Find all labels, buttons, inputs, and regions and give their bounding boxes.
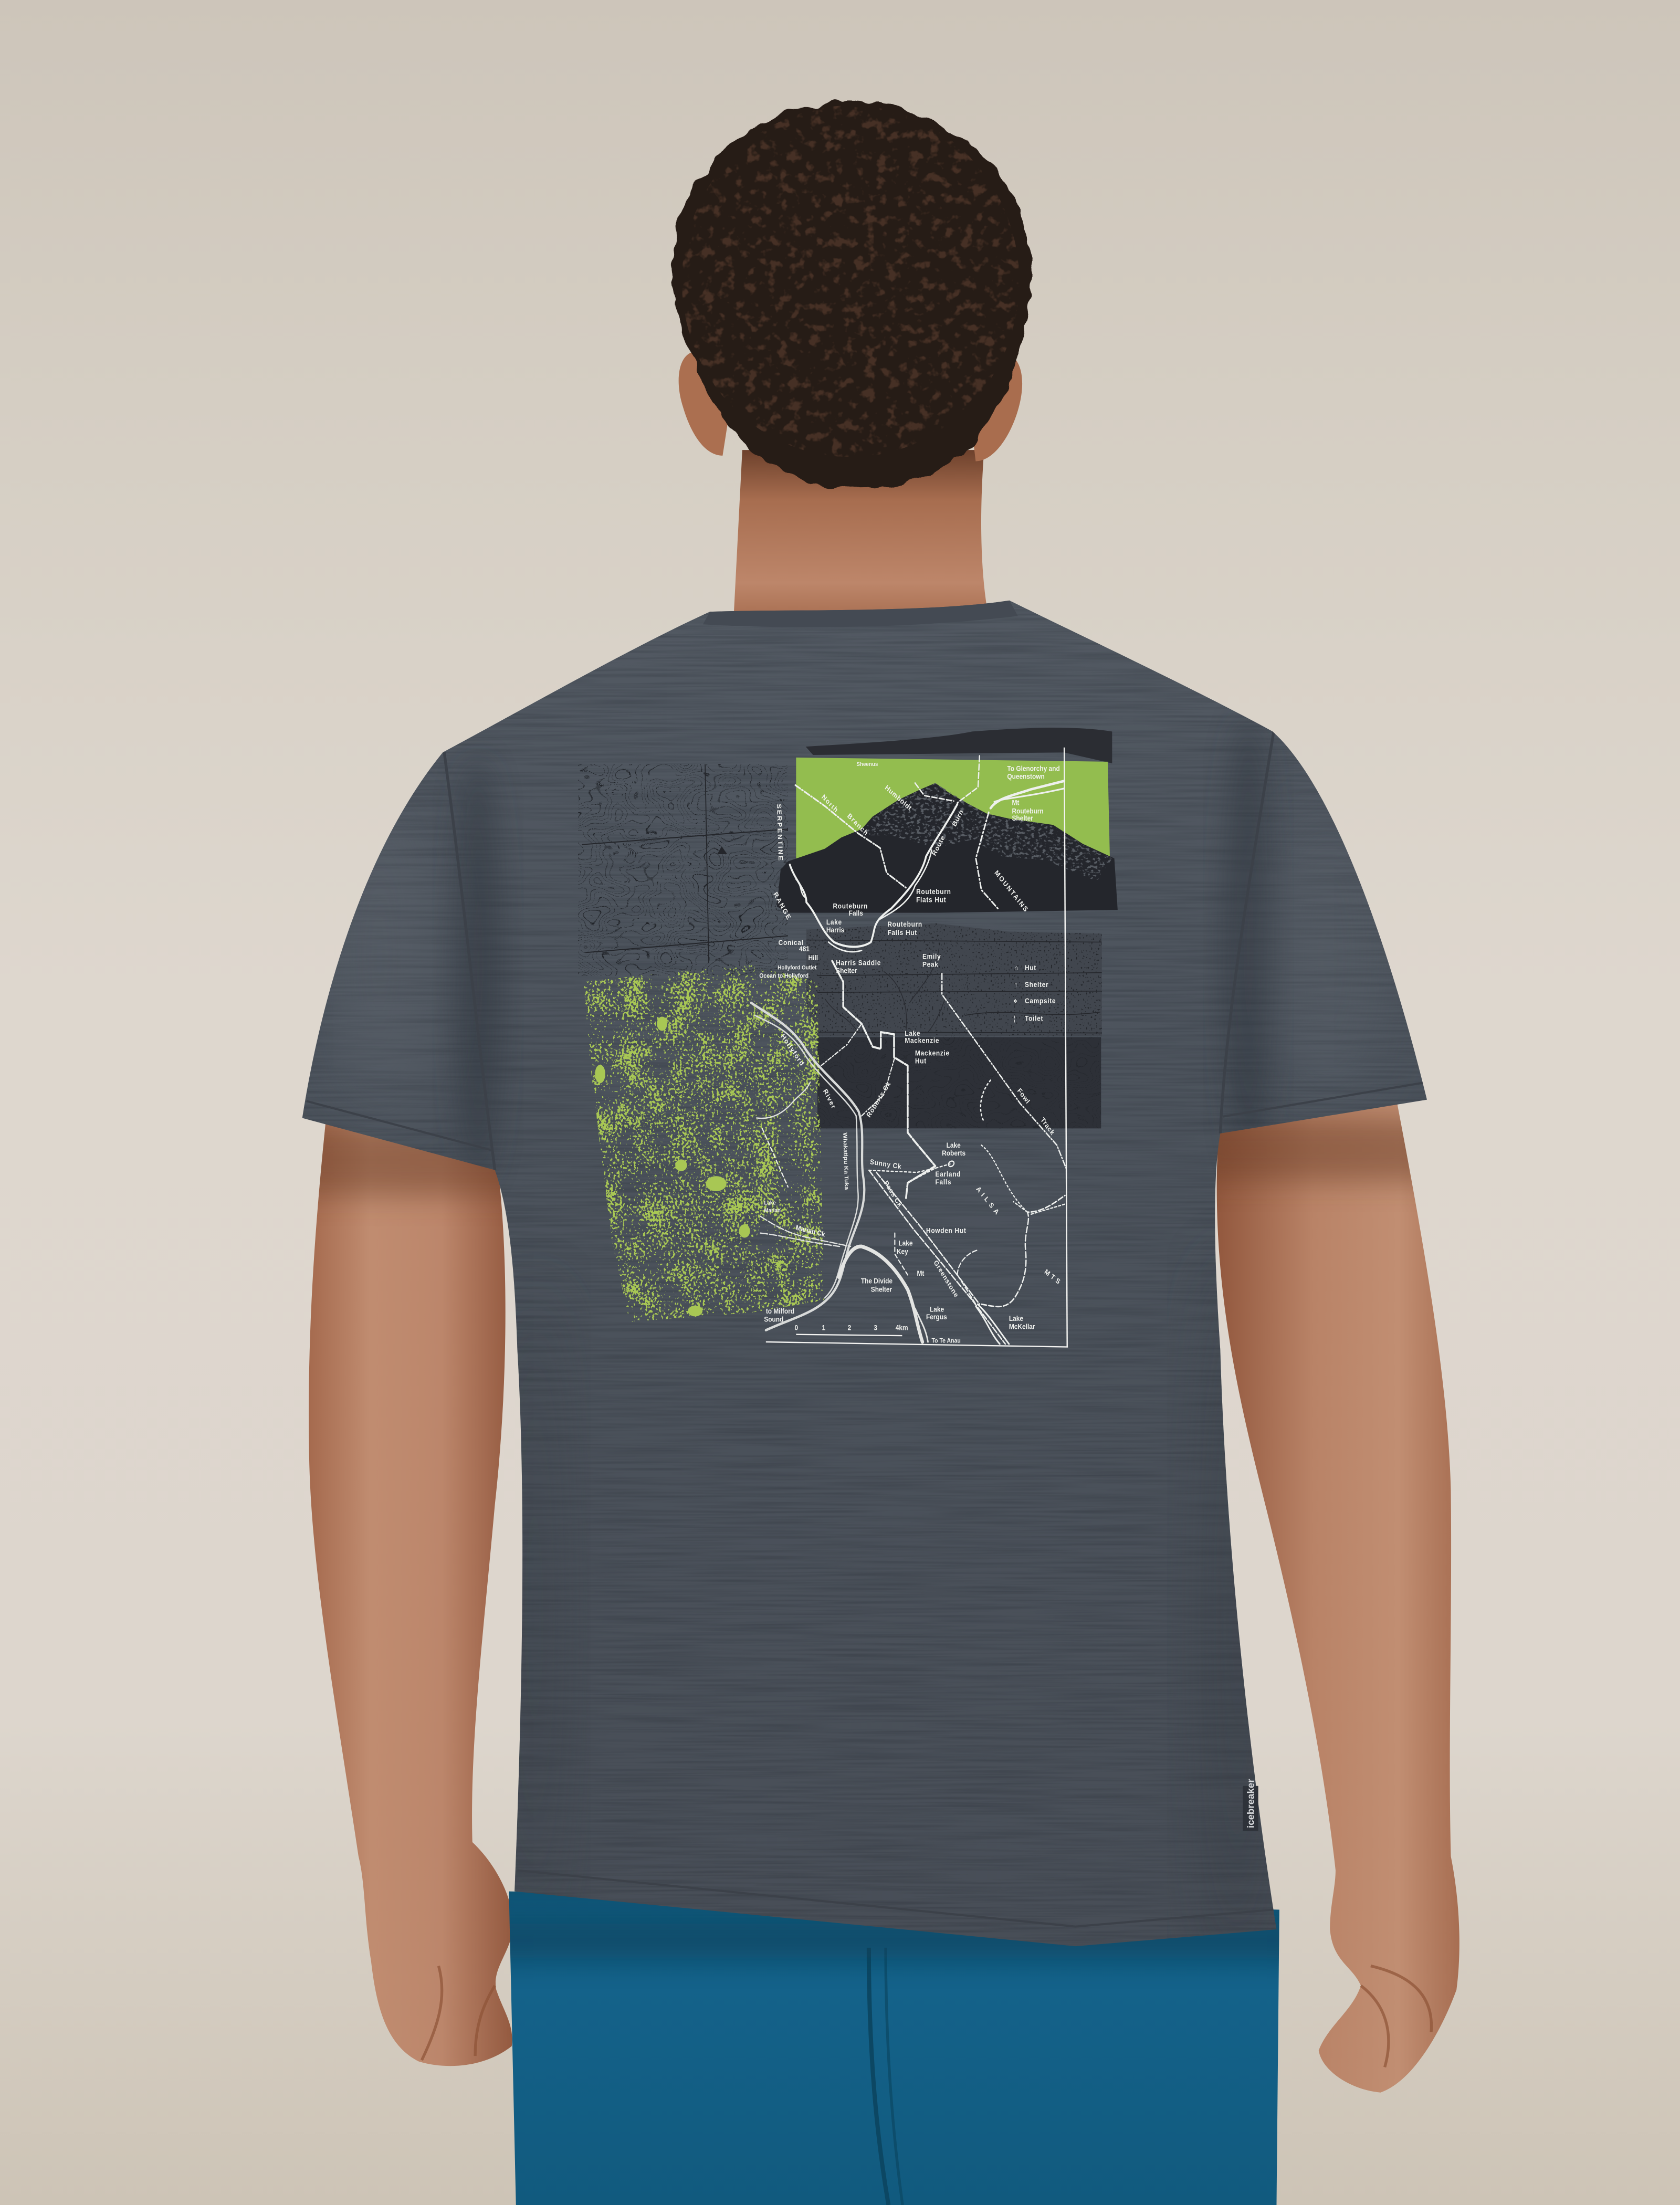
map labels: Mt [917,1269,925,1277]
map labels: Mt [1012,799,1020,807]
topographic contour panel [578,764,788,975]
white map trails and rivers [751,756,1066,1344]
map labels: to Milford [766,1307,794,1315]
map labels: 2 [848,1324,851,1332]
side label [1243,1779,1258,1831]
map labels: Sheenus [856,761,878,768]
green foliage speckle panel [584,965,825,1322]
map labels: Hill [808,953,818,962]
side label: icebreaker [1245,1779,1256,1828]
map labels: Hut [1025,963,1036,972]
map labels: 3 [874,1324,877,1332]
map labels: ⌂ [1014,963,1018,972]
map labels: Roberts [942,1149,965,1157]
map labels: Routeburn [833,902,868,910]
map labels: Peak [922,960,939,969]
map labels: Marian [764,1207,781,1214]
map labels: 1 [822,1324,825,1332]
map labels [759,761,1064,1345]
map labels: North [820,793,840,814]
map labels: SERPENTINE [775,804,784,862]
collar [703,601,1018,627]
map labels: Lake [764,1200,776,1206]
back print: map collage [578,728,1118,1347]
map labels: Fergus [926,1312,947,1321]
shorts [478,1892,1307,2205]
neat border lines and scale bar [766,748,1068,1347]
map labels: Key [897,1247,909,1256]
map labels: Lake [905,1029,920,1037]
t-shirt [302,597,1427,1983]
map labels: Falls Hut [887,928,917,937]
map labels: Track [1039,1116,1056,1137]
map labels: ↑ [1014,980,1017,989]
green sky panel [796,758,1110,860]
map labels: Hollyford [780,1032,806,1068]
map labels: Humboldt [884,783,914,812]
map labels: Queenstown [1007,772,1045,781]
map labels: To Glenorchy and [1007,764,1060,773]
map labels: Routeburn [1012,807,1044,815]
map labels: Pass Ck [883,1179,904,1209]
map labels: Emily [922,952,941,961]
map labels: Harris [826,926,844,934]
map labels: 4km [896,1324,908,1332]
map labels: Routeburn [916,887,951,896]
map labels: Lake [1009,1314,1023,1322]
map labels: Shelter [871,1285,892,1294]
map labels: Shelter [836,967,857,975]
map labels: Greenstone [932,1258,960,1299]
map labels: Burn [950,808,965,828]
map labels: McKellar [1009,1322,1035,1330]
map labels: Whakatipu Ka Tuka [842,1132,849,1190]
map labels: Marian Ck [795,1223,826,1238]
map labels: ¦ [1013,1014,1015,1023]
map labels: Roberts Ck [865,1079,892,1119]
hair [673,101,1031,490]
map labels: Harris Saddle [836,959,881,967]
map labels: Hut [915,1057,927,1065]
map labels: Shelter [1012,814,1033,822]
map labels: The Divide [861,1277,892,1285]
dark mountain [777,783,1118,913]
map labels: Hollyford Outlet [778,964,817,971]
map labels: Campsite [1025,996,1056,1005]
horizontal strata panel with dots [806,923,1102,1036]
map labels: ⋄ [1013,996,1017,1005]
model's right-side arm and hand [1195,1090,1460,2093]
map labels: 481 [799,944,810,953]
map labels: Fowl [1016,1086,1032,1106]
map labels: Earland [936,1170,961,1178]
map labels: MOUNTAINS [993,868,1030,914]
map labels: Routeburn [887,920,922,928]
map labels: Shelter [1025,980,1048,989]
map labels: Ocean to Hollyford [759,973,808,979]
map labels: Branch [846,812,870,837]
map labels: Falls [849,909,863,917]
map labels: To Te Anau [932,1338,961,1345]
map labels: Route [930,834,947,857]
neck and ears [679,352,1022,616]
map labels: Sunny Ck [869,1158,902,1171]
map labels: Mackenzie [905,1036,939,1045]
map labels: MTS [1043,1267,1064,1287]
dark swirl contour panel [817,1037,1101,1128]
map labels: Sound [764,1315,783,1324]
map labels: Falls [936,1178,951,1186]
map labels: Lake [947,1141,961,1149]
map labels: Lake [826,918,842,926]
map labels: 0 [795,1324,798,1332]
map labels: Toilet [1025,1014,1043,1023]
map labels: Flats Hut [916,896,946,904]
map labels: Conical [779,938,804,947]
map labels: Lake [898,1239,913,1247]
map labels: River [822,1087,838,1110]
map labels: RANGE [772,890,793,922]
brush stroke above the green panel [806,728,1112,763]
map labels: Mackenzie [915,1049,950,1057]
map labels: Lake [930,1305,944,1314]
map labels: AILSA [975,1184,1003,1219]
map labels: Howden Hut [926,1226,967,1235]
model's left-side arm and hand [309,1125,512,2066]
